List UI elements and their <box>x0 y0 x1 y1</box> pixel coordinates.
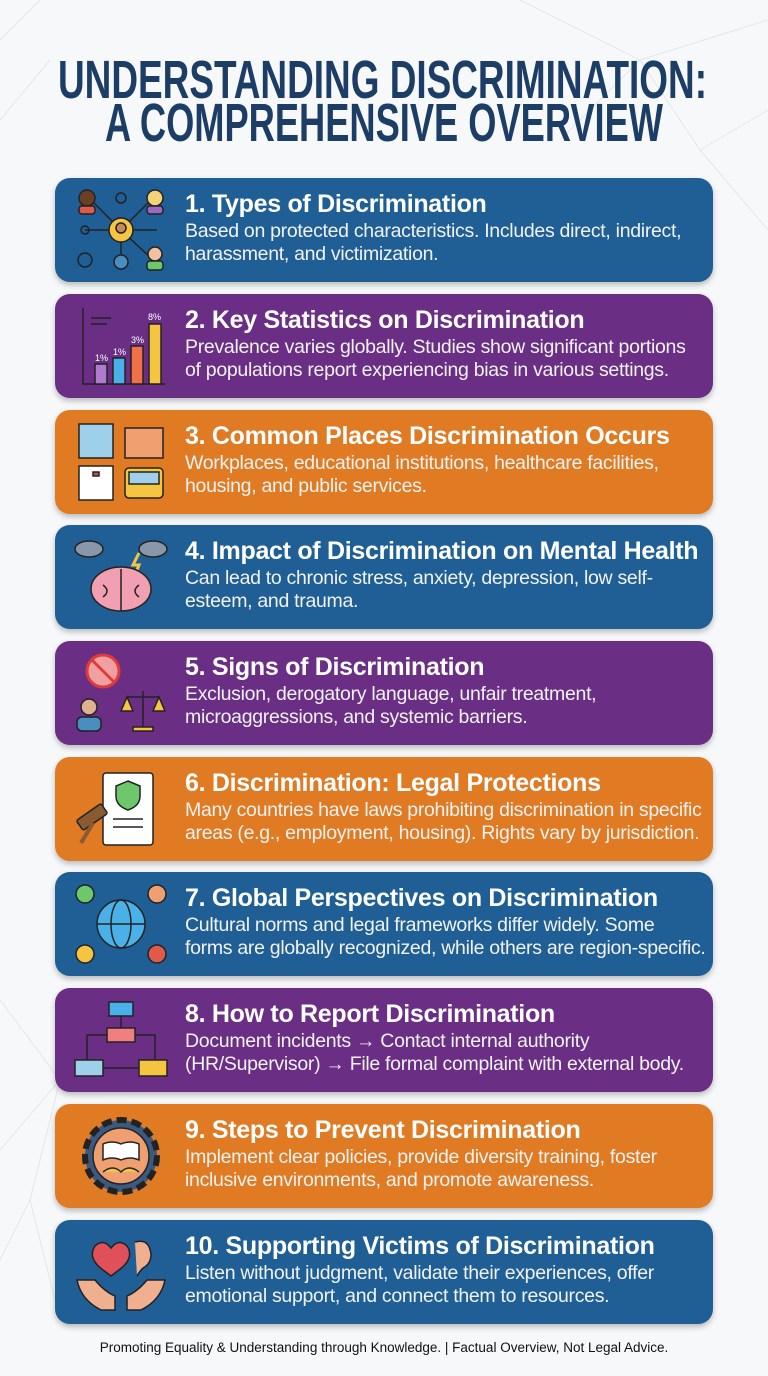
text block <box>185 884 706 959</box>
text block: harassment, and victimization. <box>185 243 438 265</box>
text block: 2. Key Statistics on Discrimination <box>185 306 584 334</box>
icon: bar chart: 1% <box>113 347 126 357</box>
panel 7: global <box>55 872 713 976</box>
icon: bar chart: 3% <box>131 335 144 345</box>
footer: Promoting Equality & Understanding through Knowledge. | Factual Overview, Not Legal Advice. <box>100 1340 668 1355</box>
icon: prohibited sign, person, scales <box>76 654 166 732</box>
icon: flowchart <box>74 1001 168 1077</box>
text block: 4. Impact of Discrimination on Mental Health <box>185 537 698 565</box>
panel 1: types <box>55 178 713 282</box>
text block: Implement clear policies, provide diversity training, foster <box>185 1146 657 1168</box>
text block <box>185 422 670 497</box>
text block: 1. Types of Discrimination <box>185 190 487 218</box>
text block <box>185 537 698 612</box>
text block: Based on protected characteristics. Includes direct, indirect, <box>185 220 681 242</box>
text block: Workplaces, educational institutions, healthcare facilities, <box>185 452 659 474</box>
text block: areas (e.g., employment, housing). Rights vary by jurisdiction. <box>185 822 699 844</box>
text block: Can lead to chronic stress, anxiety, depression, low self- <box>185 567 653 589</box>
text block <box>185 190 681 265</box>
text block: Listen without judgment, validate their experiences, offer <box>185 1262 654 1284</box>
icon: heart, ear, hands <box>76 1240 166 1311</box>
panel 5: signs <box>55 641 713 745</box>
icon: gavel and document <box>76 772 154 846</box>
icon: people <box>77 189 164 271</box>
text block <box>185 653 596 728</box>
text block <box>185 769 702 844</box>
text block: 5. Signs of Discrimination <box>185 653 484 681</box>
text block: inclusive environments, and promote awareness. <box>185 1169 594 1191</box>
icon: gear with book and handshake <box>82 1117 160 1195</box>
panel 4: mental health <box>55 525 713 629</box>
text block: 10. Supporting Victims of Discrimination <box>185 1232 655 1260</box>
text block: housing, and public services. <box>185 475 427 497</box>
title <box>58 50 707 150</box>
icon: bar chart <box>82 308 165 385</box>
panel 2: statistics <box>55 294 713 398</box>
text block: esteem, and trauma. <box>185 590 358 612</box>
panel 3: places <box>55 410 713 514</box>
text block <box>185 306 686 381</box>
text block: of populations report experiencing bias in various settings. <box>185 359 669 381</box>
text block <box>185 1116 657 1191</box>
icon: bar chart: 1% <box>95 353 108 363</box>
text block: 8. How to Report Discrimination <box>185 1000 555 1028</box>
text block: Exclusion, derogatory language, unfair treatment, <box>185 683 596 705</box>
text block: 7. Global Perspectives on Discrimination <box>185 884 658 912</box>
text block: Many countries have laws prohibiting discrimination in specific <box>185 799 702 821</box>
text block: forms are globally recognized, while others are region-specific. <box>185 937 706 959</box>
text block: 3. Common Places Discrimination Occurs <box>185 422 670 450</box>
text block <box>185 1000 684 1075</box>
icon: bar chart: 8% <box>148 312 161 322</box>
panel 9: prevention <box>55 1104 713 1208</box>
text block: emotional support, and connect them to resources. <box>185 1285 609 1307</box>
panel 6: legal <box>55 757 713 861</box>
icon: buildings <box>78 423 164 501</box>
text block: 6. Discrimination: Legal Protections <box>185 769 601 797</box>
icon: brain with storm clouds <box>74 540 168 612</box>
panel 10: support <box>55 1220 713 1324</box>
text block: Cultural norms and legal frameworks differ widely. Some <box>185 914 654 936</box>
text block: microaggressions, and systemic barriers. <box>185 706 527 728</box>
icon: globe with people <box>75 884 167 964</box>
text block: Document incidents → Contact internal authority <box>185 1030 589 1052</box>
text block: Prevalence varies globally. Studies show significant portions <box>185 336 686 358</box>
text block: (HR/Supervisor) → File formal complaint with external body. <box>185 1053 684 1075</box>
text block: 9. Steps to Prevent Discrimination <box>185 1116 580 1144</box>
text block <box>185 1232 655 1307</box>
panel 8: reporting <box>55 988 713 1092</box>
